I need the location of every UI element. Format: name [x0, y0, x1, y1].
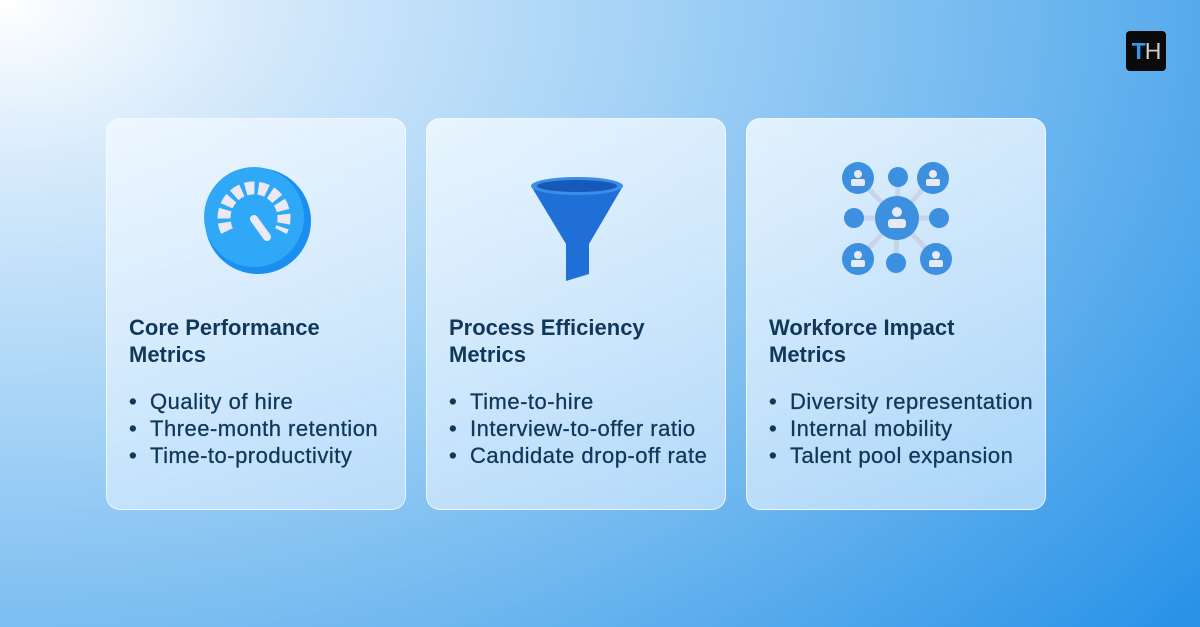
icon: gauge	[204, 167, 311, 274]
heading: Metrics	[769, 342, 846, 367]
list	[770, 389, 1033, 468]
list: Quality of hire	[150, 389, 293, 414]
heading	[769, 315, 954, 367]
list: Interview-to-offer ratio	[470, 416, 696, 441]
list: Diversity representation	[790, 389, 1033, 414]
list: Candidate drop-off rate	[470, 443, 707, 468]
list: Internal mobility	[790, 416, 953, 441]
list: Time-to-productivity	[150, 443, 352, 468]
list: Time-to-hire	[470, 389, 594, 414]
panel: core performance	[106, 118, 406, 510]
logo: TH	[1132, 38, 1160, 64]
panel: workforce impact	[746, 118, 1046, 510]
heading	[129, 315, 320, 367]
list	[450, 389, 707, 468]
heading	[449, 315, 645, 367]
heading: Workforce Impact	[769, 315, 954, 340]
icon: network	[842, 162, 952, 275]
list: Three-month retention	[150, 416, 378, 441]
icon: funnel	[531, 177, 623, 281]
heading: Metrics	[449, 342, 526, 367]
heading: Metrics	[129, 342, 206, 367]
list	[130, 389, 378, 468]
heading: Core Performance	[129, 315, 320, 340]
logo	[1126, 31, 1166, 71]
list: Talent pool expansion	[790, 443, 1013, 468]
panel: process efficiency	[426, 118, 726, 510]
heading: Process Efficiency	[449, 315, 645, 340]
